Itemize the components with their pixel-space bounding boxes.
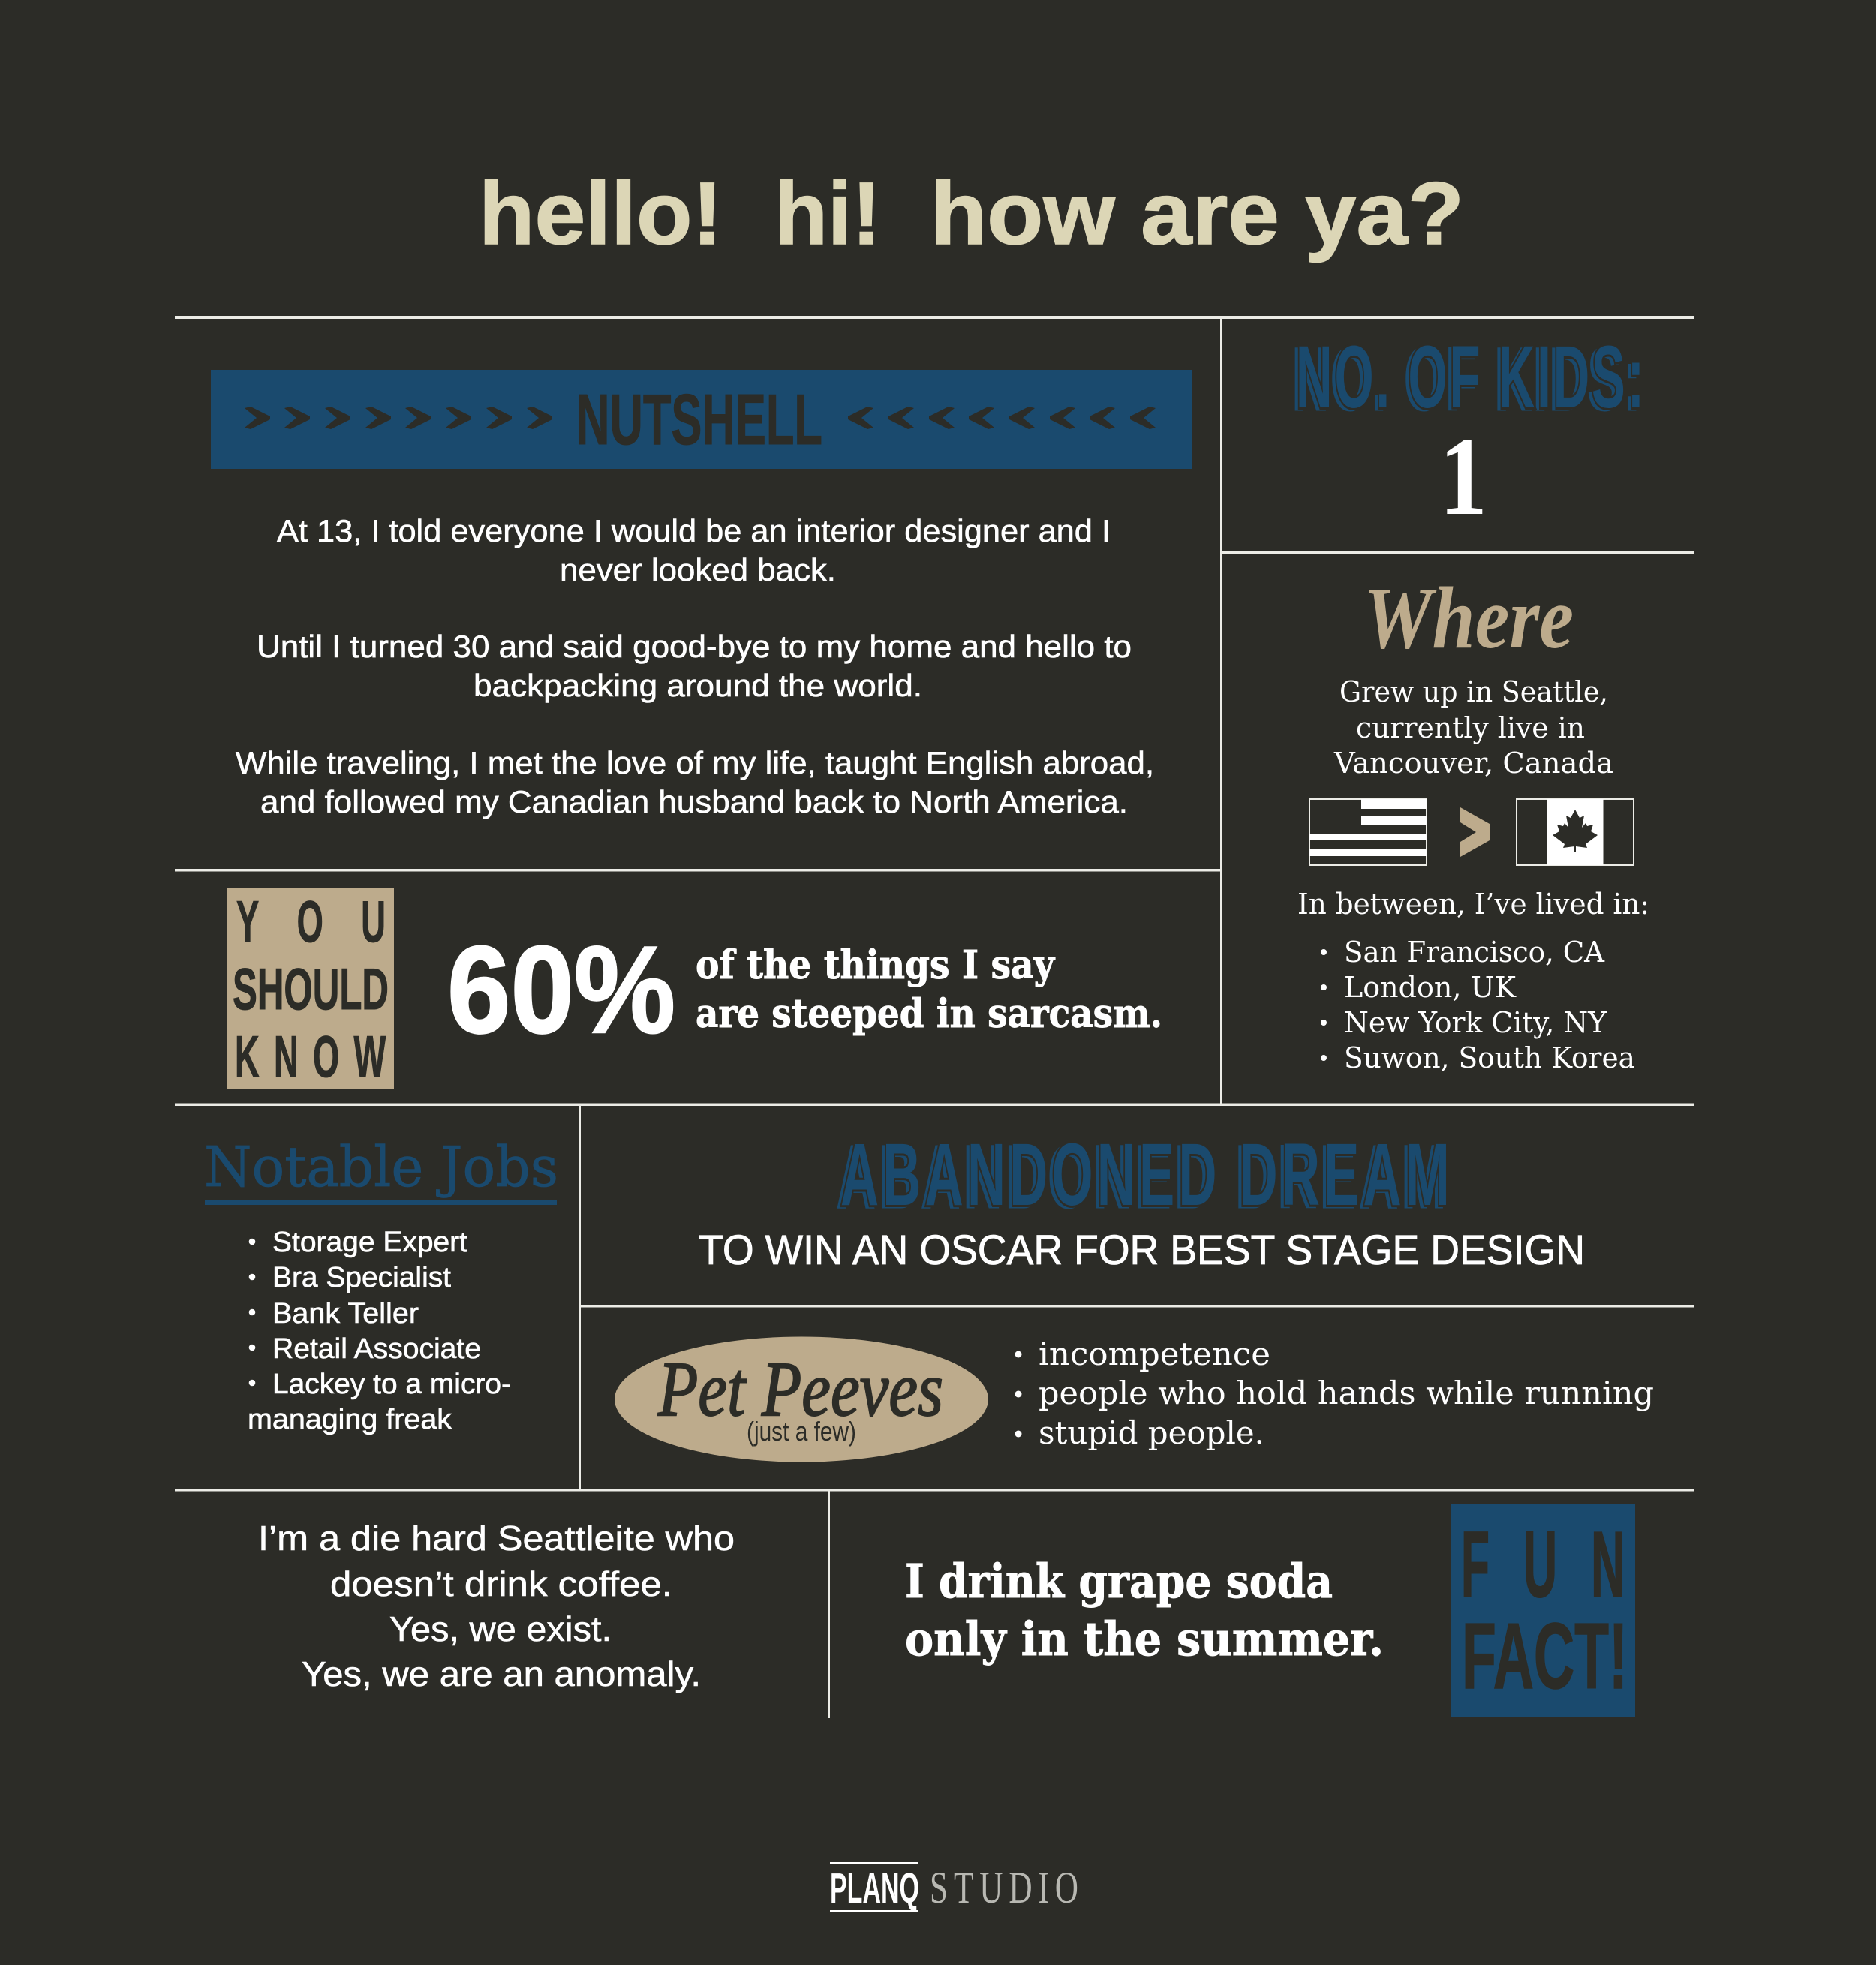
badge: pet peeves oval: Pet Peeves (657, 1346, 943, 1432)
panel: where (1297, 569, 1649, 1074)
stat caption: of the things I say (696, 942, 1056, 988)
where intro text: Grew up in Seattle, (1339, 675, 1608, 708)
peeves list (1015, 1336, 1654, 1451)
panel: nutshell (211, 370, 1192, 819)
chevrons pointing right (245, 407, 552, 429)
nutshell story text: Until I turned 30 and said good-bye to my home and hello to (257, 629, 1132, 664)
logo: planq studio: PLANQ (830, 1864, 919, 1912)
list of cities: Suwon, South Korea (1344, 1041, 1635, 1074)
fun fact text (905, 1554, 1384, 1666)
stat caption: are steeped in sarcasm. (696, 991, 1162, 1037)
stat: 60%: 60% (447, 921, 675, 1059)
logo: planq studio (830, 1862, 1078, 1913)
nutshell story text: While traveling, I met the love of my life, taught English abroad, (236, 745, 1154, 780)
panel: fun fact (905, 1504, 1635, 1717)
badge: you should know: KNOW (235, 1023, 386, 1089)
nutshell story text: backpacking around the world. (474, 668, 922, 703)
nutshell story text: never looked back. (560, 552, 836, 587)
jobs list: managing freak (248, 1404, 452, 1435)
nutshell story text (236, 513, 1154, 819)
heading: no. of kids: NO. OF KIDS: (1296, 328, 1644, 427)
badge: you should know (227, 888, 394, 1089)
peeves list: stupid people. (1039, 1414, 1264, 1451)
title (479, 164, 1464, 263)
peeves list: people who hold hands while running (1039, 1375, 1654, 1411)
where intro text: Vancouver, Canada (1333, 747, 1613, 780)
kids count: 1 (1439, 414, 1487, 539)
arrow: chevron to canada (1460, 807, 1490, 857)
panel: seattleite text: Yes, we are an anomaly. (302, 1654, 701, 1693)
jobs list: Storage Expert (272, 1227, 467, 1258)
nutshell story text: and followed my Canadian husband back to North America. (260, 784, 1128, 819)
icon: canada flag (1517, 799, 1634, 865)
badge: fun fact (1451, 1504, 1635, 1717)
heading: abandoned dream: ABANDONED DREAM (840, 1125, 1450, 1224)
jobs list: Bra Specialist (272, 1262, 451, 1293)
title: hi! (774, 164, 881, 263)
list of cities: New York City, NY (1344, 1006, 1607, 1039)
panel: seattleite text: I’m a die hard Seattleite who (258, 1519, 735, 1558)
fun fact text: only in the summer. (905, 1612, 1384, 1666)
heading: notable jobs: Notable Jobs (204, 1135, 558, 1200)
stat caption (696, 942, 1162, 1037)
where intro text (1333, 675, 1613, 780)
badge: fun fact: FACT! (1462, 1605, 1628, 1708)
jobs list: Bank Teller (272, 1298, 419, 1330)
title: how are ya? (930, 164, 1464, 263)
nutshell banner (211, 370, 1192, 469)
heading: where: Where (1363, 569, 1574, 667)
nutshell story text: At 13, I told everyone I would be an interior designer and I (277, 513, 1111, 548)
list of cities: London, UK (1344, 971, 1517, 1004)
in between text: In between, I’ve lived in: (1297, 888, 1649, 921)
panel: seattleite text: Yes, we exist. (389, 1609, 612, 1648)
dream caption: TO WIN AN OSCAR FOR BEST STAGE DESIGN (699, 1226, 1585, 1273)
badge: you should know: YOU (236, 888, 386, 954)
panel: number of kids (1292, 328, 1644, 539)
where intro text: currently live in (1356, 711, 1585, 744)
heading: abandoned dream: ABANDONED DREAM (837, 1127, 1446, 1226)
badge: fun fact: FUN (1461, 1512, 1625, 1617)
panel: seattleite text: doesn’t drink coffee. (330, 1564, 672, 1603)
panel: seattleite text (258, 1519, 735, 1693)
fun fact text: I drink grape soda (905, 1554, 1333, 1609)
list of cities (1321, 936, 1635, 1074)
badge: you should know: SHOULD (233, 956, 389, 1022)
panel: pet peeves (615, 1336, 1654, 1462)
icon: us flag (1309, 799, 1427, 865)
peeves list: incompetence (1039, 1336, 1270, 1372)
jobs list: Lackey to a micro- (272, 1369, 511, 1400)
panel: notable jobs (204, 1135, 558, 1435)
title: hello! (479, 164, 723, 263)
panel: abandoned dream (699, 1125, 1585, 1273)
nutshell heading: NUTSHELL (576, 380, 822, 460)
logo: planq studio: STUDIO (930, 1863, 1078, 1913)
badge: pet peeves oval: (just a few) (747, 1416, 856, 1447)
list of cities: San Francisco, CA (1344, 936, 1605, 969)
badge: pet peeves oval (615, 1337, 988, 1462)
heading: no. of kids: NO. OF KIDS: (1292, 330, 1640, 429)
chevrons pointing left (848, 407, 1156, 429)
jobs list (248, 1227, 511, 1435)
panel: you should know (227, 888, 1162, 1089)
jobs list: Retail Associate (272, 1333, 481, 1365)
